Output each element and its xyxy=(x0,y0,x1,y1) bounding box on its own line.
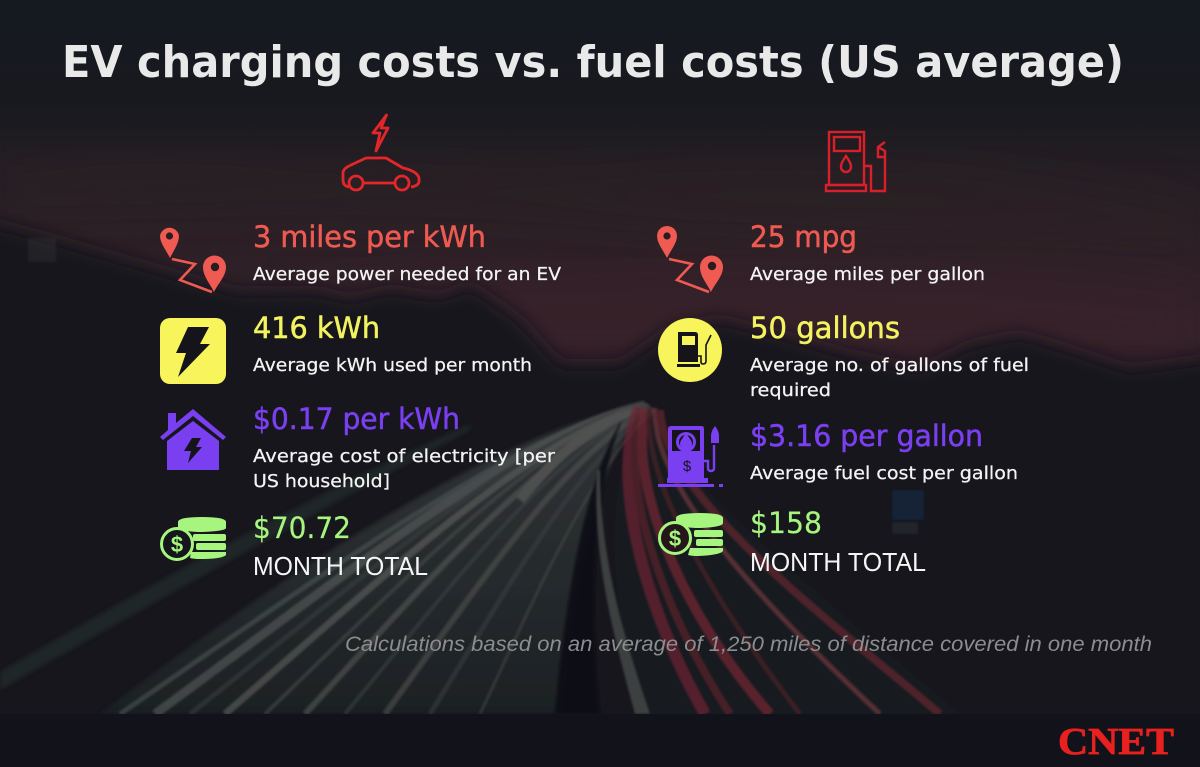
stat: EV month total: $70.72 xyxy=(253,511,351,545)
road base xyxy=(100,405,650,714)
column: fuel xyxy=(657,220,1029,577)
column: EV charging xyxy=(160,220,562,581)
stat: fuel price: Average fuel cost per gallon xyxy=(750,463,1018,484)
footnote: Calculations based on an average of 1,250 miles of distance covered in one month xyxy=(345,633,1152,656)
silhouettes xyxy=(0,218,1200,406)
icon: coin stack xyxy=(660,513,723,556)
stat: kWh per month: Average kWh used per month xyxy=(253,355,532,376)
stat: electricity cost xyxy=(253,402,556,492)
stat: fuel month total xyxy=(750,506,926,577)
logo: CNET: CNET xyxy=(1058,721,1174,763)
right carriageway base xyxy=(615,412,960,714)
icon: house with bolt xyxy=(160,409,226,470)
icon: yellow pump disc xyxy=(658,318,722,382)
white light trails xyxy=(120,405,654,714)
median xyxy=(555,420,622,714)
icon: coin stack: $ xyxy=(171,532,183,557)
stat: gallons: 50 gallons xyxy=(750,311,900,345)
icon: yellow bolt tile xyxy=(160,318,226,384)
stat: electricity cost: $0.17 per kWh xyxy=(253,402,460,436)
stat: electricity cost: US household] xyxy=(253,471,390,492)
stat: gallons: required xyxy=(750,380,831,401)
icon: electric car with bolt xyxy=(343,115,419,190)
stat: miles per kWh: Average power needed for an EV xyxy=(253,264,562,285)
guard rail xyxy=(0,424,470,690)
road sign xyxy=(892,490,924,520)
stat: mpg: Average miles per gallon xyxy=(750,264,985,285)
background photo: dusk highway xyxy=(0,112,1200,714)
icon: route pins xyxy=(657,226,723,292)
stat: kWh per month xyxy=(253,311,532,376)
stat: miles per kWh xyxy=(253,220,562,285)
stat: mpg xyxy=(750,220,985,285)
title: EV charging costs vs. fuel costs (US average) xyxy=(62,37,1124,88)
icon: coin stack: $ xyxy=(669,526,681,551)
stat: electricity cost: Average cost of electricity [per xyxy=(253,446,556,467)
stat: gallons: Average no. of gallons of fuel xyxy=(750,355,1029,376)
stat: fuel month total: $158 xyxy=(750,506,822,540)
stat: kWh per month: 416 kWh xyxy=(253,311,380,345)
icon: purple pump with dollar: $ xyxy=(683,458,692,475)
stat: miles per kWh: 3 miles per kWh xyxy=(253,220,486,254)
icon: route pins xyxy=(160,228,226,292)
bottom band xyxy=(0,714,1200,767)
icon: purple pump with dollar xyxy=(658,426,723,487)
icon: fuel pump outline xyxy=(826,132,885,191)
stat: fuel month total: MONTH TOTAL xyxy=(750,547,926,577)
stat: EV month total: MONTH TOTAL xyxy=(253,551,428,581)
stat: EV month total xyxy=(253,511,428,581)
icon: coin stack xyxy=(162,517,226,560)
stat: fuel price xyxy=(750,419,1018,484)
red light trails xyxy=(628,408,940,714)
stat: fuel price: $3.16 per gallon xyxy=(750,419,983,453)
stat: gallons xyxy=(750,311,1029,401)
stat: mpg: 25 mpg xyxy=(750,220,857,254)
